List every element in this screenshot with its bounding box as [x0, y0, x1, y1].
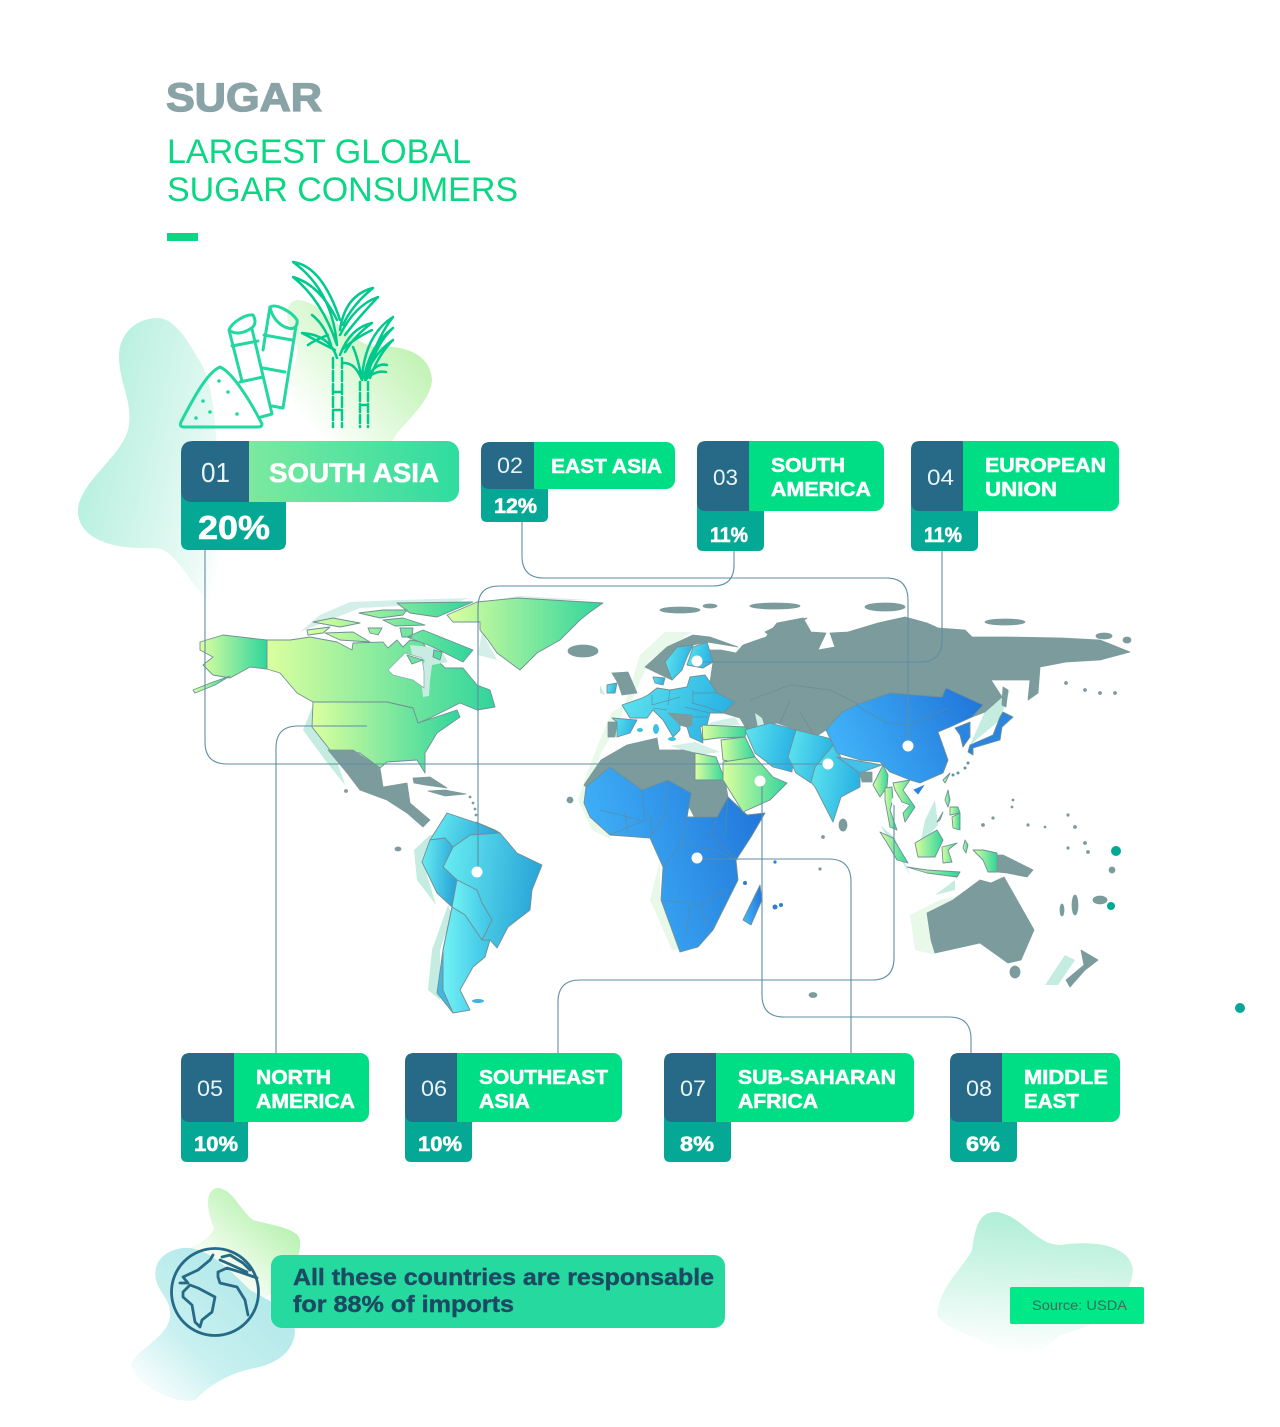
background blob: left teal: [78, 318, 251, 611]
map: East Asia: [826, 688, 1013, 793]
map: grey Mexico, Central America, Caribbean: [328, 750, 573, 851]
background blob: bottom green: [185, 1188, 300, 1300]
card 08: Middle East: 6%: [966, 1133, 1000, 1156]
card 02: East Asia: 12%: [494, 495, 537, 518]
card 07: Sub-Saharan Africa: [664, 1053, 914, 1162]
icon: globe: [172, 1248, 258, 1336]
card 08: Middle East: 08: [966, 1076, 992, 1101]
map: grey Russia and Central Asia, UK, Iceland, Arctic islands: [568, 603, 1131, 738]
icon: sugar pile and sugar cane: [180, 262, 393, 427]
map: Europe: [607, 642, 735, 743]
line: 01 South Asia: [205, 550, 828, 764]
card 01: South Asia: SOUTH ASIA: [269, 458, 439, 488]
card 03: South America: AMERICA: [771, 479, 871, 501]
world map: [193, 596, 1131, 1013]
card 02: East Asia: 02: [497, 453, 523, 478]
title: [166, 76, 518, 241]
line: 08 Middle East: [762, 781, 971, 1053]
map location dots: [472, 656, 914, 878]
card 03: South America: 03: [713, 465, 738, 490]
background blob: bottom blue: [131, 1248, 295, 1401]
card 05: North America: [181, 1053, 369, 1162]
title: LARGEST GLOBAL: [167, 133, 471, 171]
card 04: European Union: UNION: [985, 479, 1057, 501]
card 07: Sub-Saharan Africa: 8%: [680, 1133, 714, 1156]
connector lines: [205, 522, 971, 1053]
card 05: North America: AMERICA: [256, 1091, 355, 1113]
line: 02 East Asia: [522, 522, 908, 746]
source label: Source: USDA: [1032, 1297, 1128, 1313]
icon: sugar cane palms: [293, 262, 393, 427]
callout: imports: for 88% of imports: [293, 1291, 514, 1317]
callout: imports: [271, 1255, 725, 1328]
line: 05 North America: [276, 726, 367, 1053]
card 01: South Asia: [181, 441, 459, 550]
card 01: South Asia: 20%: [198, 509, 270, 546]
map: North America: [193, 598, 603, 773]
background blob: bottom right: [937, 1212, 1133, 1356]
background blob: top green: [262, 300, 432, 470]
line: 04 European Union: [697, 551, 942, 662]
card 06: Southeast Asia: 06: [421, 1076, 447, 1101]
decorative teal dots: [1107, 846, 1245, 1013]
map: Africa: [584, 738, 824, 998]
card 08: Middle East: [950, 1053, 1120, 1162]
card 05: North America: 10%: [194, 1133, 238, 1156]
card 06: Southeast Asia: 10%: [418, 1133, 462, 1156]
map: South America: [422, 813, 542, 1013]
card 06: Southeast Asia: [405, 1053, 622, 1162]
title: SUGAR: [166, 76, 322, 120]
card 02: East Asia: [481, 442, 675, 522]
card 04: European Union: [911, 441, 1119, 551]
map: grey Oceania: [927, 799, 1115, 987]
card 07: Sub-Saharan Africa: SUB-SAHARAN: [738, 1067, 896, 1089]
card 03: South America: 11%: [710, 524, 748, 547]
line: 03 South America: [478, 551, 734, 872]
card 03: South America: SOUTH: [771, 455, 845, 477]
card 06: Southeast Asia: ASIA: [479, 1091, 530, 1113]
card 07: Sub-Saharan Africa: 07: [680, 1076, 706, 1101]
card 01: South Asia: 01: [201, 457, 230, 488]
map: South Asia: [745, 723, 882, 831]
line: 07 Sub-Saharan Africa: [697, 859, 851, 1053]
title: SUGAR CONSUMERS: [167, 171, 518, 209]
card 08: Middle East: EAST: [1024, 1091, 1079, 1113]
callout: imports: All these countries are responsable: [293, 1264, 714, 1290]
map: Southeast Asia: [873, 765, 997, 877]
card 05: North America: 05: [197, 1076, 223, 1101]
map shadows: [300, 596, 1075, 1000]
card 05: North America: NORTH: [256, 1067, 331, 1089]
map: Middle East: [702, 725, 787, 812]
card 04: European Union: 11%: [924, 524, 962, 547]
card 08: Middle East: MIDDLE: [1024, 1067, 1108, 1089]
card 02: East Asia: EAST ASIA: [551, 456, 662, 478]
line: 06 Southeast Asia: [558, 800, 894, 1053]
card 07: Sub-Saharan Africa: AFRICA: [738, 1091, 818, 1113]
card 04: European Union: 04: [927, 465, 954, 490]
source label: [1010, 1287, 1144, 1324]
card 04: European Union: EUROPEAN: [985, 455, 1106, 477]
card 03: South America: [697, 441, 884, 551]
card 06: Southeast Asia: SOUTHEAST: [479, 1067, 608, 1089]
